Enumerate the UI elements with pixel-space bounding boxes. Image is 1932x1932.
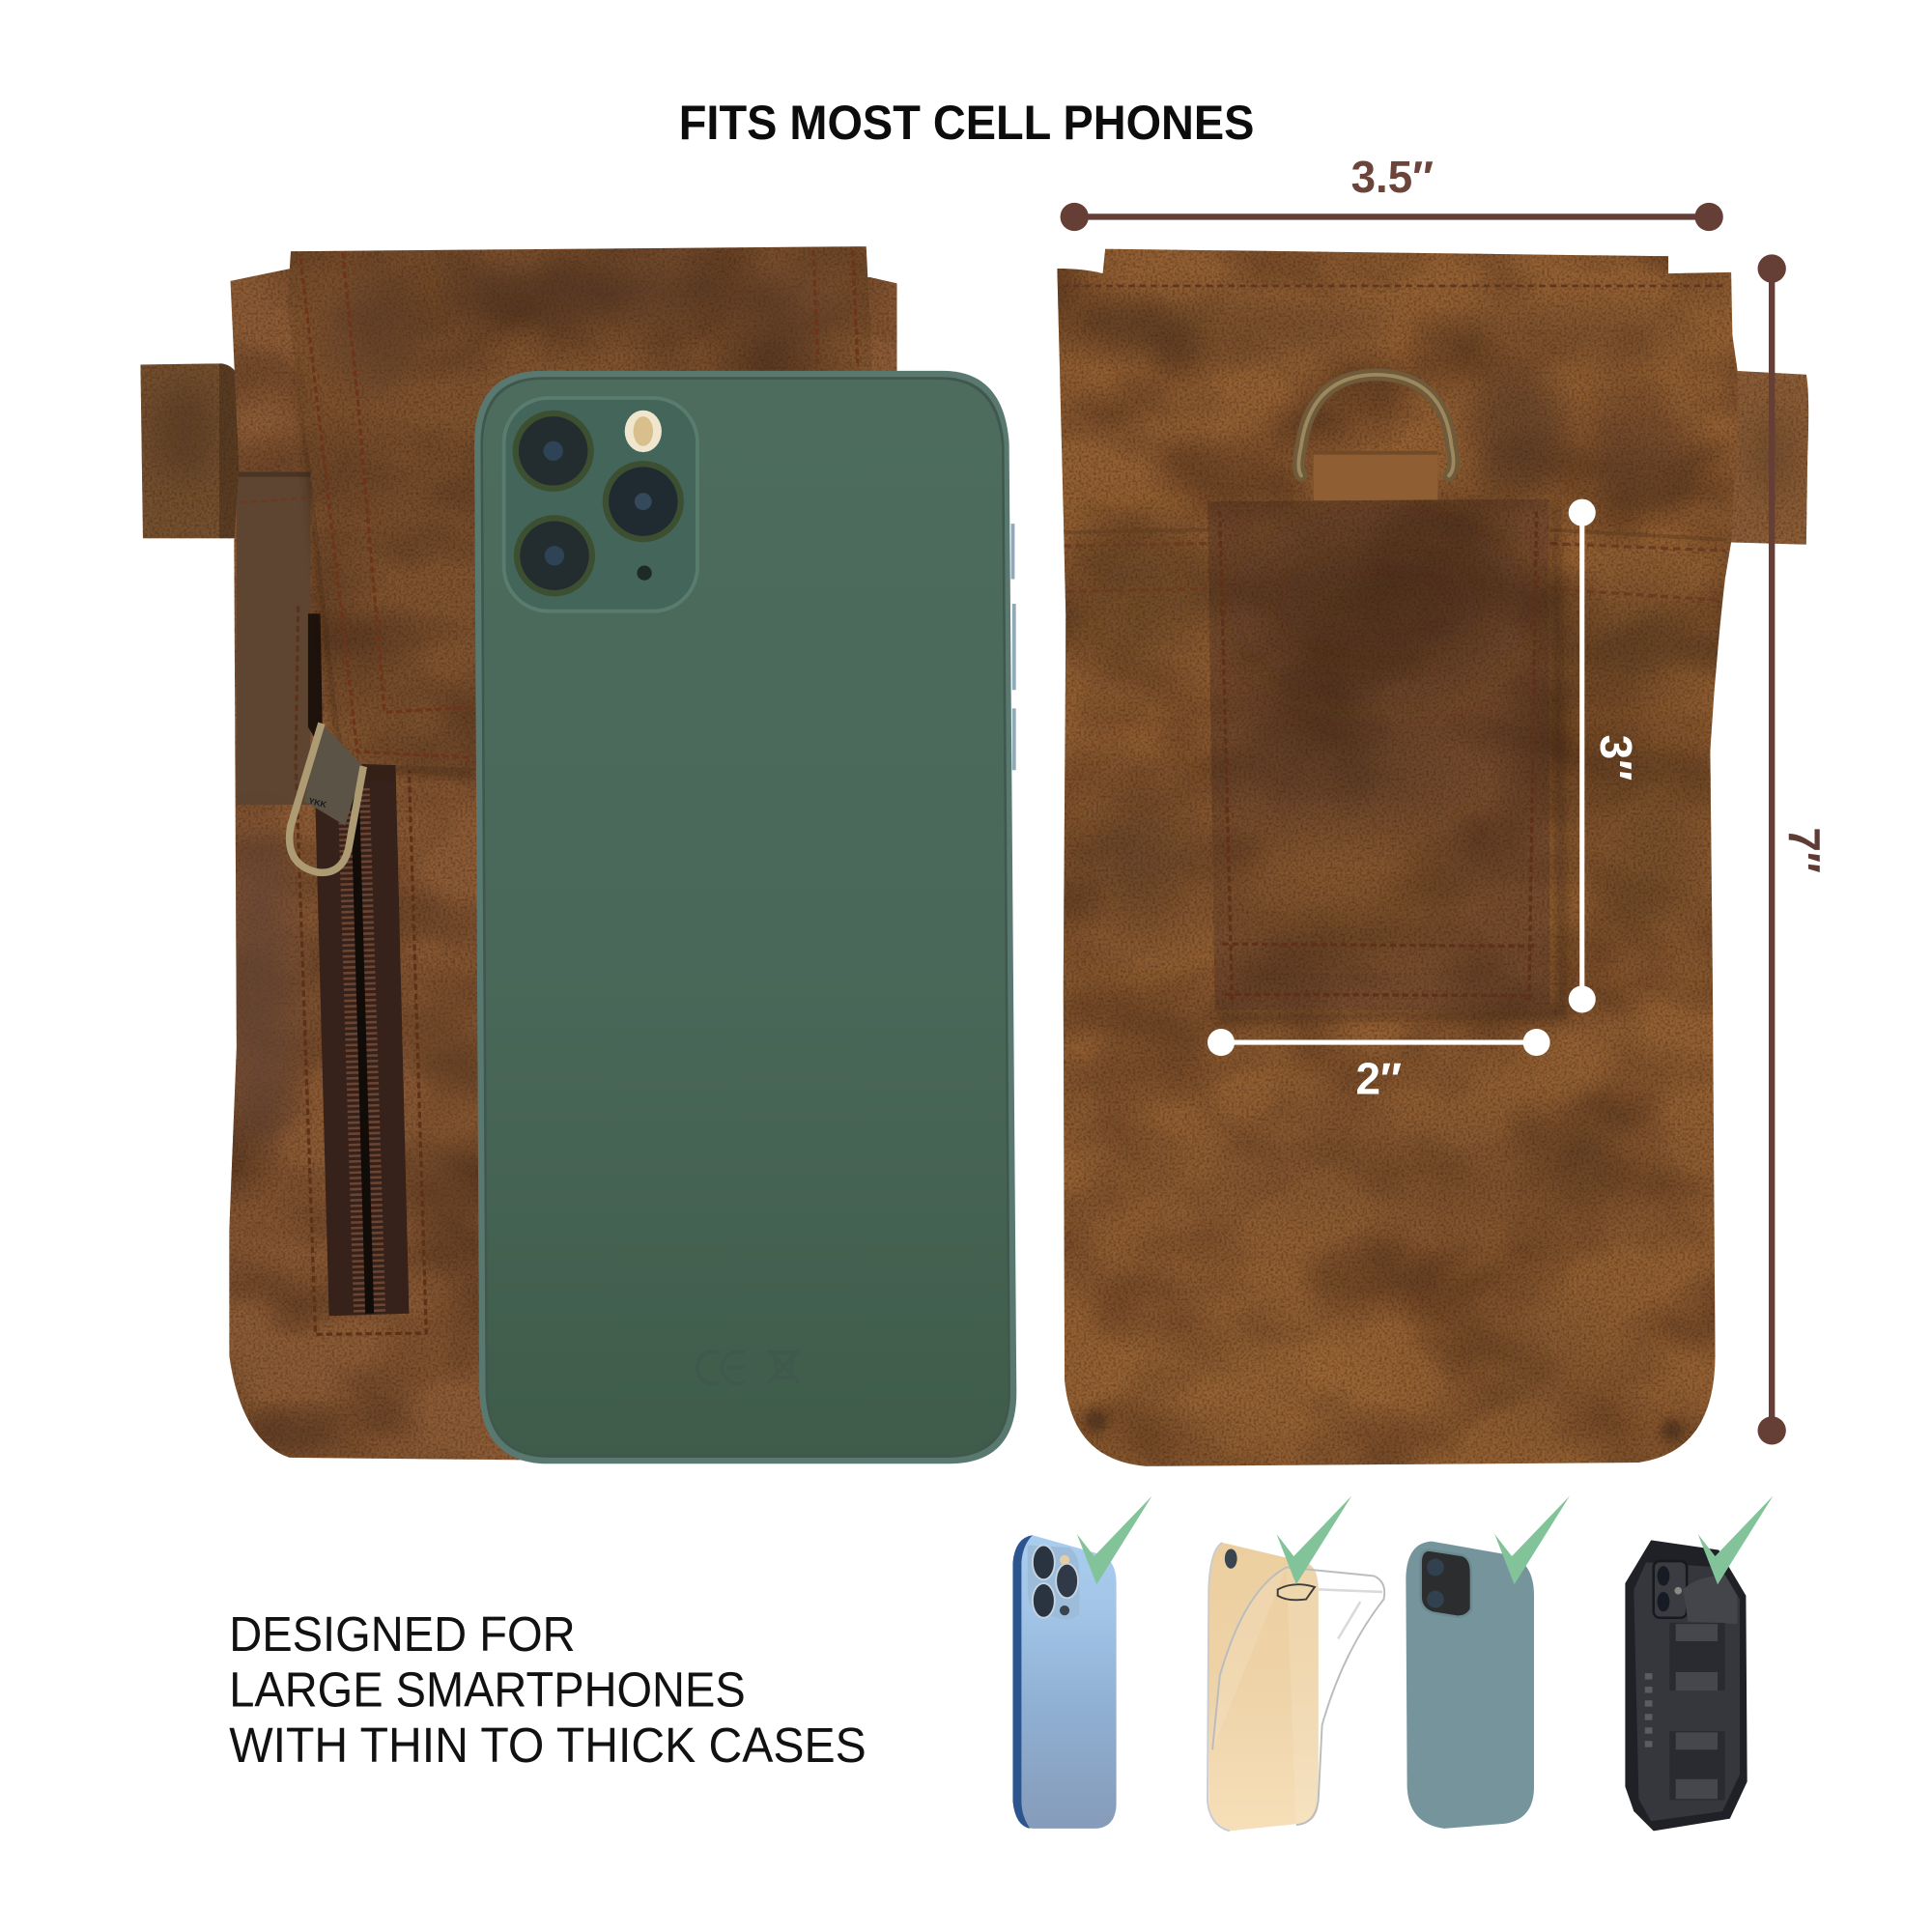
compatible phone: blue smartphone (1012, 1535, 1117, 1829)
check mark: teal case (1494, 1495, 1570, 1584)
flash (625, 411, 662, 452)
smartphone back (474, 371, 1016, 1463)
check mark: rugged case (1698, 1495, 1773, 1584)
microphone (637, 565, 652, 581)
side buttons (1012, 524, 1014, 770)
compatible phone: rugged black case (1625, 1540, 1747, 1831)
dimension: pouch width 3.5 inches (1061, 152, 1723, 231)
zipper pull: YKK (307, 796, 328, 810)
dimension: strap height 3 inches (1569, 499, 1641, 1012)
dimension: strap width 2 inches: 2″ (1356, 1054, 1402, 1104)
pouch body leather (1047, 241, 1749, 1472)
title: FITS MOST CELL PHONES (679, 96, 1254, 150)
right pouch back view (1047, 241, 1814, 1472)
belt strap (1202, 493, 1559, 1016)
regulatory marks (697, 1350, 799, 1383)
belt loop tab left (141, 363, 240, 539)
dimension: pouch height 7 inches (1758, 254, 1830, 1445)
compatible phone: gold phone in clear case (1208, 1543, 1384, 1831)
dimension: strap height 3 inches: 3″ (1591, 735, 1641, 781)
caption: LARGE SMARTPHONES (229, 1662, 746, 1718)
left pouch with phone in front (135, 241, 1016, 1479)
infographic canvas (141, 105, 1820, 1832)
camera module (504, 398, 697, 611)
camera lens top (513, 411, 594, 492)
camera lens bottom (514, 515, 595, 596)
caption: WITH THIN TO THICK CASES (229, 1718, 867, 1773)
caption: DESIGNED FOR (229, 1606, 576, 1662)
check mark: clear case (1276, 1495, 1351, 1584)
check mark: blue phone (1077, 1495, 1152, 1584)
dimension: pouch height 7 inches: 7″ (1779, 827, 1830, 873)
caption (229, 1606, 867, 1773)
dimension: strap width 2 inches (1208, 1029, 1550, 1104)
check marks (1077, 1495, 1773, 1584)
zipper pocket stitching (296, 607, 426, 1334)
D-ring (1298, 375, 1454, 475)
zipper (308, 613, 409, 1316)
zipper pull (290, 724, 363, 872)
pouch body (222, 259, 912, 1479)
belt loop tab right (1731, 371, 1808, 545)
leather flap (277, 241, 881, 777)
dimension: pouch width 3.5 inches: 3.5″ (1351, 152, 1434, 202)
camera lens right (603, 461, 684, 542)
compatible phone: teal silicone case (1406, 1542, 1534, 1829)
D-ring leather tab (1314, 451, 1438, 502)
